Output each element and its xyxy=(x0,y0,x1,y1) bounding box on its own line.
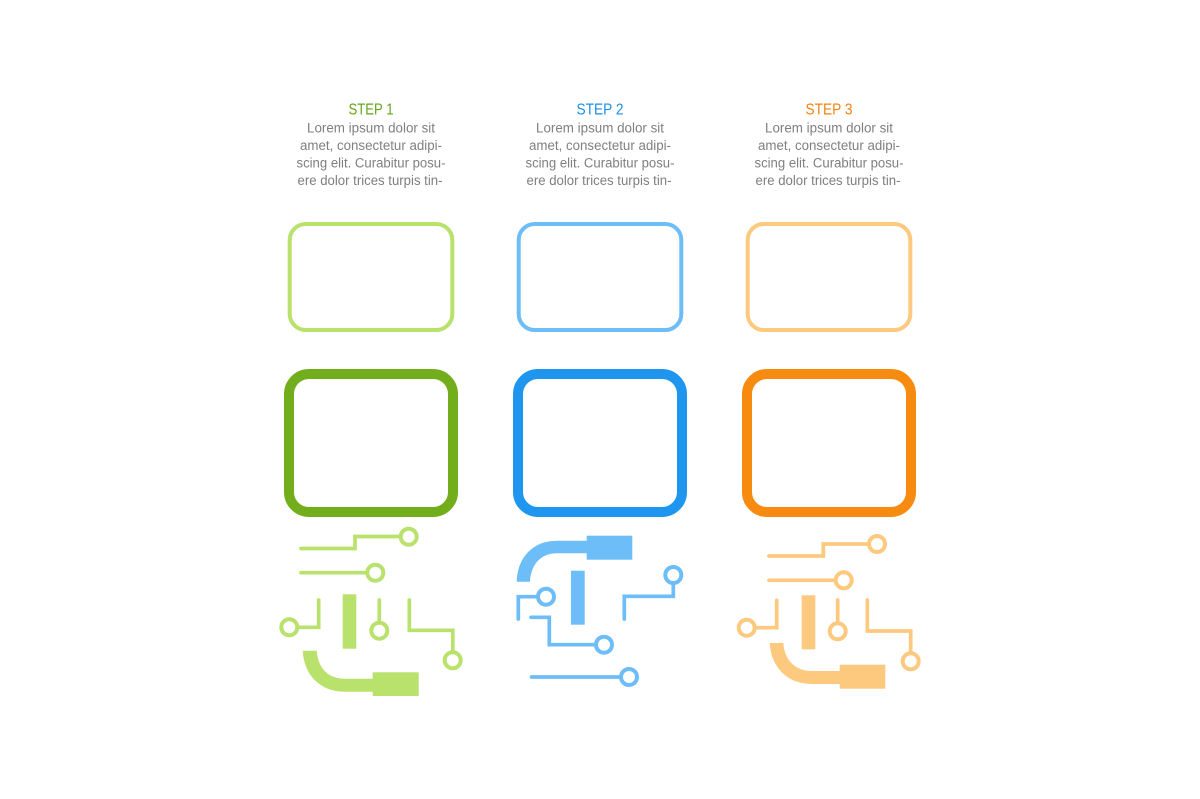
panel: dark green outline box xyxy=(289,374,453,512)
bottom trace with node xyxy=(532,669,637,685)
heading: step 2: STEP 2 xyxy=(576,102,624,118)
panel: dark blue outline box xyxy=(518,374,682,512)
left trace with node xyxy=(739,600,777,636)
right trace with node xyxy=(409,600,461,668)
left trace with node xyxy=(281,600,319,635)
text block: step 3 description: scing elit. Curabitur posu- xyxy=(754,156,904,170)
vertical bar xyxy=(571,571,585,625)
middle trace with node xyxy=(830,600,846,639)
right trace with node xyxy=(624,567,681,619)
heading: step 1: STEP 1 xyxy=(348,102,394,118)
second trace with node xyxy=(769,572,852,588)
text block: step 2 description: ere dolor trices turpis tin- xyxy=(526,173,672,188)
text block: step 1 description: ere dolor trices turpis tin- xyxy=(298,173,442,188)
text block: step 1 description: Lorem ipsum dolor sit xyxy=(307,120,435,136)
icon: orange circuit traces xyxy=(739,536,919,689)
text block: step 3 description: ere dolor trices turpis tin- xyxy=(756,173,900,188)
text block: step 2 description: scing elit. Curabitur posu- xyxy=(526,156,674,170)
vertical bar xyxy=(343,594,356,649)
middle trace with node xyxy=(371,600,387,639)
panel: step 2 heading and text xyxy=(526,102,674,188)
right trace with node xyxy=(867,600,919,669)
bent connector xyxy=(517,536,632,582)
middle trace with node xyxy=(531,617,612,653)
text block: step 3 description: amet, consectetur adipi- xyxy=(758,138,900,153)
icon: blue circuit traces xyxy=(517,536,681,685)
text block: step 1 description: amet, consectetur adipi- xyxy=(300,138,442,153)
text block: step 2 description xyxy=(526,120,674,188)
vertical bar xyxy=(802,595,815,649)
bent connector xyxy=(303,651,419,696)
second trace with node xyxy=(301,565,383,581)
text block: step 3 description xyxy=(754,120,904,188)
panel: dark orange outline box xyxy=(747,374,911,512)
left trace with node xyxy=(518,589,554,619)
panel: light blue outline box xyxy=(519,224,681,330)
top trace with node xyxy=(301,529,417,548)
top trace with node xyxy=(769,536,885,556)
bent connector xyxy=(770,643,885,689)
heading: step 3: STEP 3 xyxy=(806,102,853,118)
panel: step 3 heading and text xyxy=(754,102,904,188)
text block: step 1 description xyxy=(296,120,446,188)
text block: step 3 description: Lorem ipsum dolor sit xyxy=(765,120,893,136)
icon: green circuit traces xyxy=(281,529,461,696)
panel: step 1 heading and text xyxy=(296,102,446,188)
panel: light green outline box xyxy=(290,224,452,330)
panel: light orange outline box xyxy=(748,224,910,330)
text block: step 2 description: amet, consectetur adipi- xyxy=(529,138,671,153)
text block: step 2 description: Lorem ipsum dolor sit xyxy=(536,120,664,136)
text block: step 1 description: scing elit. Curabitur posu- xyxy=(296,156,446,170)
